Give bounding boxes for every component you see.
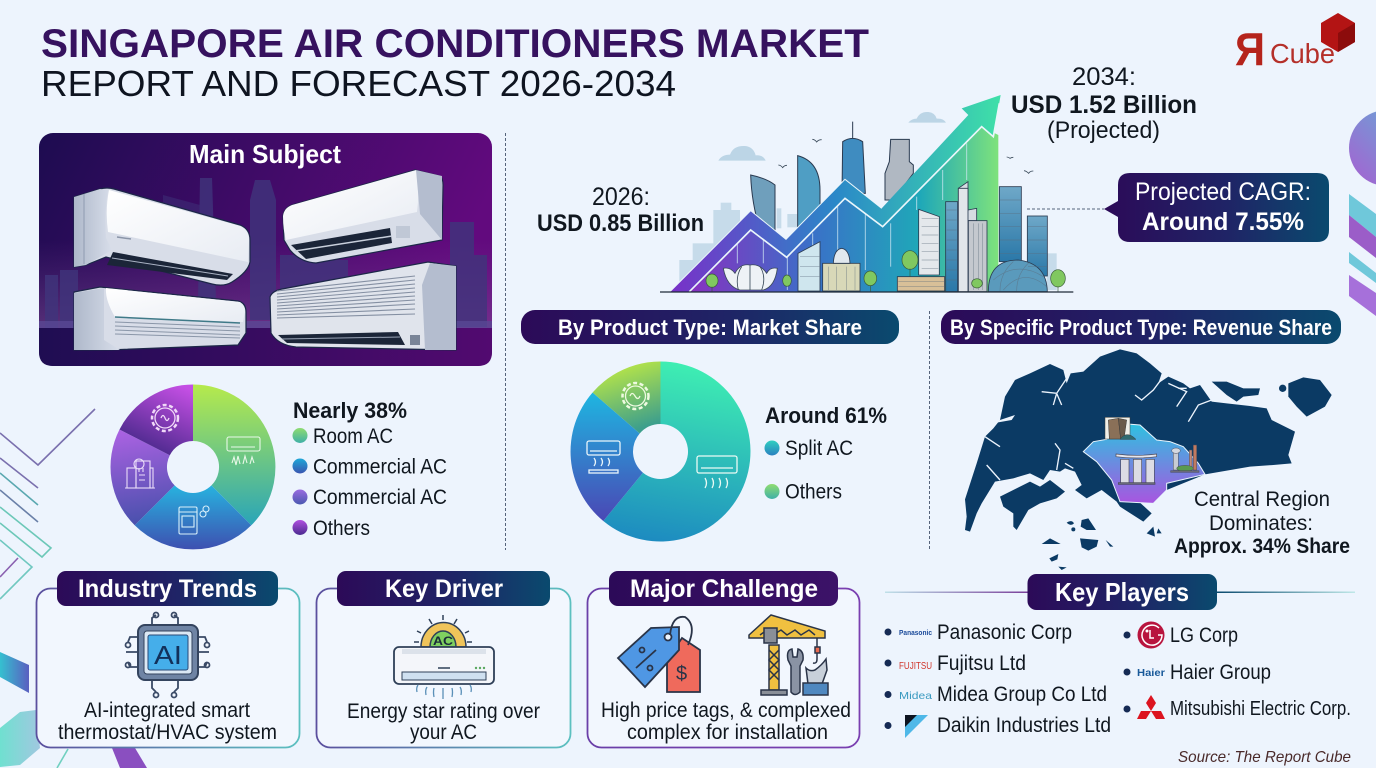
list: key players right: LG Corp [1170, 624, 1238, 647]
text: AI-integrated smart [84, 699, 250, 722]
heading [337, 571, 550, 606]
icon: AI chip: AI [154, 640, 182, 670]
text [58, 699, 277, 744]
legend: product type donut [764, 403, 887, 504]
legend: main subject donut: Commercial AC [313, 456, 447, 478]
heading: by specific product type: By Specific Product Type: Revenue Share [950, 315, 1332, 340]
list: key players right: Haier Group [1170, 661, 1271, 684]
growth arrow [670, 95, 1001, 292]
icon: crane and tools [749, 615, 828, 695]
southern islands [1042, 518, 1162, 570]
icon: price tags [618, 617, 700, 692]
title [41, 22, 869, 104]
Jurong island [1000, 480, 1065, 530]
icon: gear [152, 405, 178, 431]
list: key players left: Daikin Industries Ltd [937, 714, 1111, 737]
legend: main subject donut: Room AC [313, 425, 393, 448]
heading: Industry Trends [78, 575, 257, 603]
legend: product type donut: Others [785, 480, 842, 504]
landmark: casino towers [1116, 454, 1157, 484]
callout: 2034 value: USD 1.52 Billion [1011, 91, 1197, 119]
callout: central region: Central Region [1194, 488, 1330, 511]
callout: 2034 value: (Projected) [1047, 117, 1160, 144]
lotus building [723, 265, 777, 290]
title: REPORT AND FORECAST 2026-2034 [41, 63, 676, 104]
AC unit 3 [74, 287, 246, 350]
text [347, 700, 540, 744]
window lines [800, 200, 1047, 291]
heading [57, 571, 278, 606]
icon: AI chip [126, 612, 210, 698]
chart: donut main subject share [111, 384, 275, 549]
clouds [718, 112, 946, 161]
callout: projected CAGR: Projected CAGR: [1135, 178, 1311, 206]
logo: LG [1138, 622, 1164, 648]
AC unit 1 [74, 188, 250, 285]
callout: 2026 value: USD 0.85 Billion [537, 210, 704, 237]
icon: AC energy rating: AC [433, 634, 453, 648]
decoration: left line pattern [0, 409, 147, 768]
heading: Major Challenge [630, 575, 818, 603]
legend: main subject donut [292, 398, 447, 540]
AC unit 2 [283, 170, 443, 263]
text: thermostat/HVAC system [58, 721, 277, 744]
callout: central region: Approx. 34% Share [1174, 535, 1350, 558]
logo: RCube [1235, 13, 1355, 75]
logo: Midea: Midea [899, 690, 932, 702]
text [601, 699, 851, 744]
decoration: right shapes [1349, 110, 1376, 316]
legend: product type donut: Around 61% [765, 403, 887, 428]
icon: wall AC [587, 441, 620, 473]
heading [609, 571, 838, 606]
icon: commercial unit [179, 506, 209, 534]
northeast islands [1212, 382, 1260, 402]
panel skyline [39, 178, 492, 366]
icon: price tags: $ [676, 663, 687, 685]
AC unit 4 [270, 262, 456, 350]
icon: building [125, 459, 155, 488]
background skyline [679, 203, 1057, 290]
callout: central region: Dominates: [1209, 512, 1313, 535]
callout: 2034 value [1011, 63, 1197, 144]
towers behind the chart [751, 122, 913, 230]
panel heading: Main Subject [189, 139, 341, 169]
foreground buildings [798, 182, 1047, 292]
card: key driver [316, 571, 570, 748]
icon: gear [622, 383, 648, 409]
callout: projected CAGR [1027, 173, 1329, 242]
legend: main subject donut: Commercial AC [313, 486, 447, 509]
chart: donut product type [571, 362, 750, 542]
logo: Haier: Haier [1137, 667, 1165, 679]
birds [778, 139, 1033, 173]
text: Energy star rating over [347, 700, 540, 723]
list: key players left: Fujitsu Ltd [937, 652, 1026, 675]
text: High price tags, & complexed [601, 699, 851, 722]
heading: by specific product type [941, 310, 1341, 344]
central region [1083, 423, 1205, 503]
list: key players right [1124, 622, 1351, 720]
chart: forecast arrow and skyline [660, 95, 1073, 292]
rivers [985, 373, 1212, 480]
text: complex for installation [627, 721, 828, 744]
callout: projected CAGR: Around 7.55% [1142, 208, 1304, 236]
callout: 2026 value [537, 183, 704, 237]
legend: main subject donut: Others [313, 517, 370, 540]
logo: RCube: Я [1235, 23, 1265, 75]
landmark: monuments [1171, 445, 1199, 472]
callout: 2034 value: 2034: [1072, 63, 1136, 91]
legend: main subject donut: Nearly 38% [293, 398, 407, 423]
heading: Key Driver [385, 575, 503, 603]
growth area [689, 127, 998, 292]
panel: main subject [39, 133, 492, 366]
logo: RCube: Cube [1270, 38, 1335, 69]
landmark: hill [1105, 417, 1136, 439]
callout: 2026 value: 2026: [592, 183, 650, 211]
heading: key players [885, 574, 1355, 610]
text: your AC [410, 721, 477, 744]
heading: by product type: By Product Type: Market Share [558, 315, 862, 340]
logo: Daikin [905, 715, 928, 738]
list: key players left: Panasonic Corp [937, 621, 1072, 644]
icon: room AC [227, 437, 260, 465]
divider lines [506, 133, 930, 550]
icon: split AC [697, 456, 737, 488]
source note: Source: The Report Cube [1178, 749, 1351, 766]
main island [965, 349, 1295, 532]
legend: product type donut: Split AC [785, 437, 853, 460]
map: Singapore [965, 349, 1332, 570]
trees [706, 251, 1065, 291]
heading: by product type [521, 310, 899, 344]
title: SINGAPORE AIR CONDITIONERS MARKET [41, 22, 869, 66]
list: key players left [884, 621, 1111, 738]
logo: Panasonic: Panasonic [899, 628, 932, 637]
callout: central region [1174, 488, 1350, 558]
logo: Mitsubishi [1137, 695, 1165, 719]
list: key players left: Midea Group Co Ltd [937, 683, 1107, 706]
card: major challenge [588, 571, 860, 748]
heading: key players: Key Players [1055, 577, 1189, 607]
logo: Fujitsu: FUJITSU [899, 661, 932, 672]
card: industry trends [36, 571, 300, 748]
icon: AC energy rating [394, 615, 494, 699]
